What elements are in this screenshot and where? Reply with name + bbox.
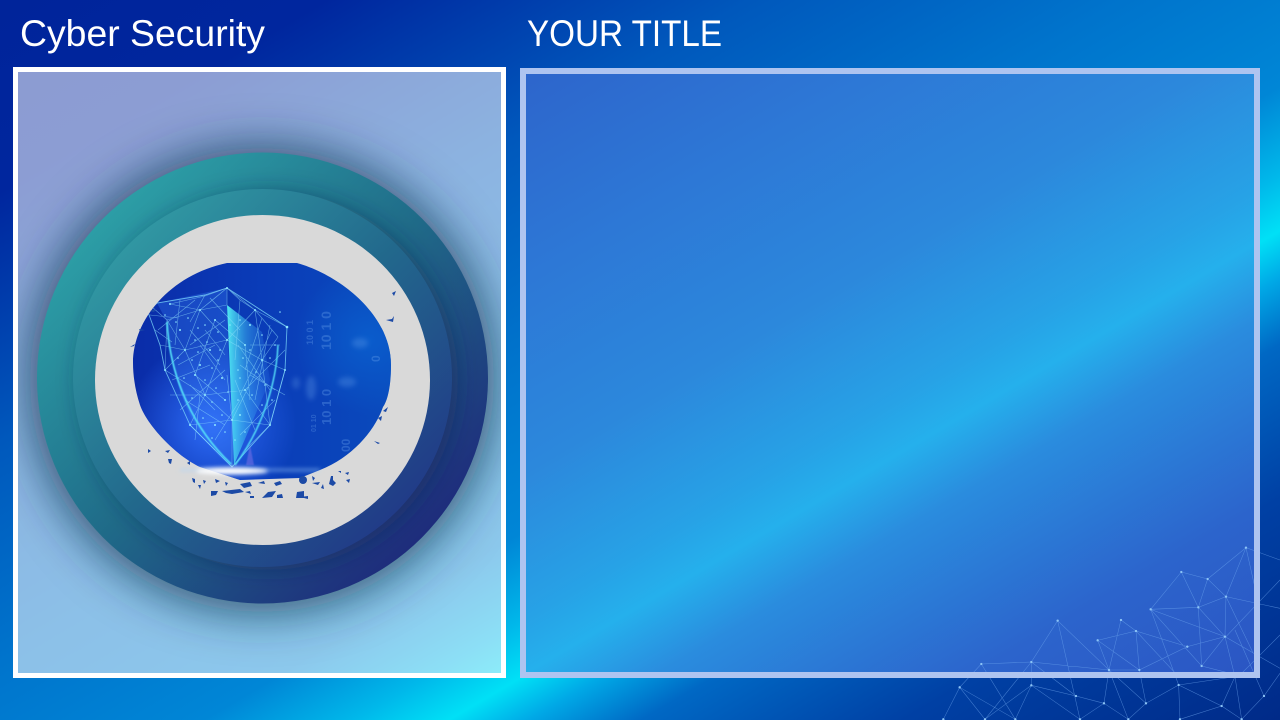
binary digits <box>292 311 383 452</box>
shattered debris fragments <box>130 291 396 499</box>
heading: Cyber Security: Cyber Security <box>20 13 265 54</box>
network mesh decoration <box>942 546 1280 720</box>
shield picture <box>133 263 391 480</box>
panel: left image frame <box>16 70 504 676</box>
concentric circles with shield illustration <box>37 152 488 604</box>
light glow at shield base <box>180 468 320 474</box>
binary digits: 10 1 0 <box>318 311 334 350</box>
right panel fill <box>523 71 1257 675</box>
circle shadow <box>30 148 494 612</box>
heading: YOUR TITLE: YOUR TITLE <box>527 13 722 54</box>
binary digits: 00 <box>339 438 353 452</box>
binary digits: 10 0 1 <box>305 320 315 345</box>
middle ring <box>73 189 458 570</box>
inner grey disc <box>95 215 430 545</box>
panel: right content frame <box>523 71 1257 675</box>
binary digits: 0 <box>369 355 383 362</box>
binary digits: 10 1 0 <box>319 389 334 425</box>
binary digits: 01 10 <box>311 414 318 432</box>
outer ring <box>37 152 488 604</box>
shield <box>148 287 288 467</box>
